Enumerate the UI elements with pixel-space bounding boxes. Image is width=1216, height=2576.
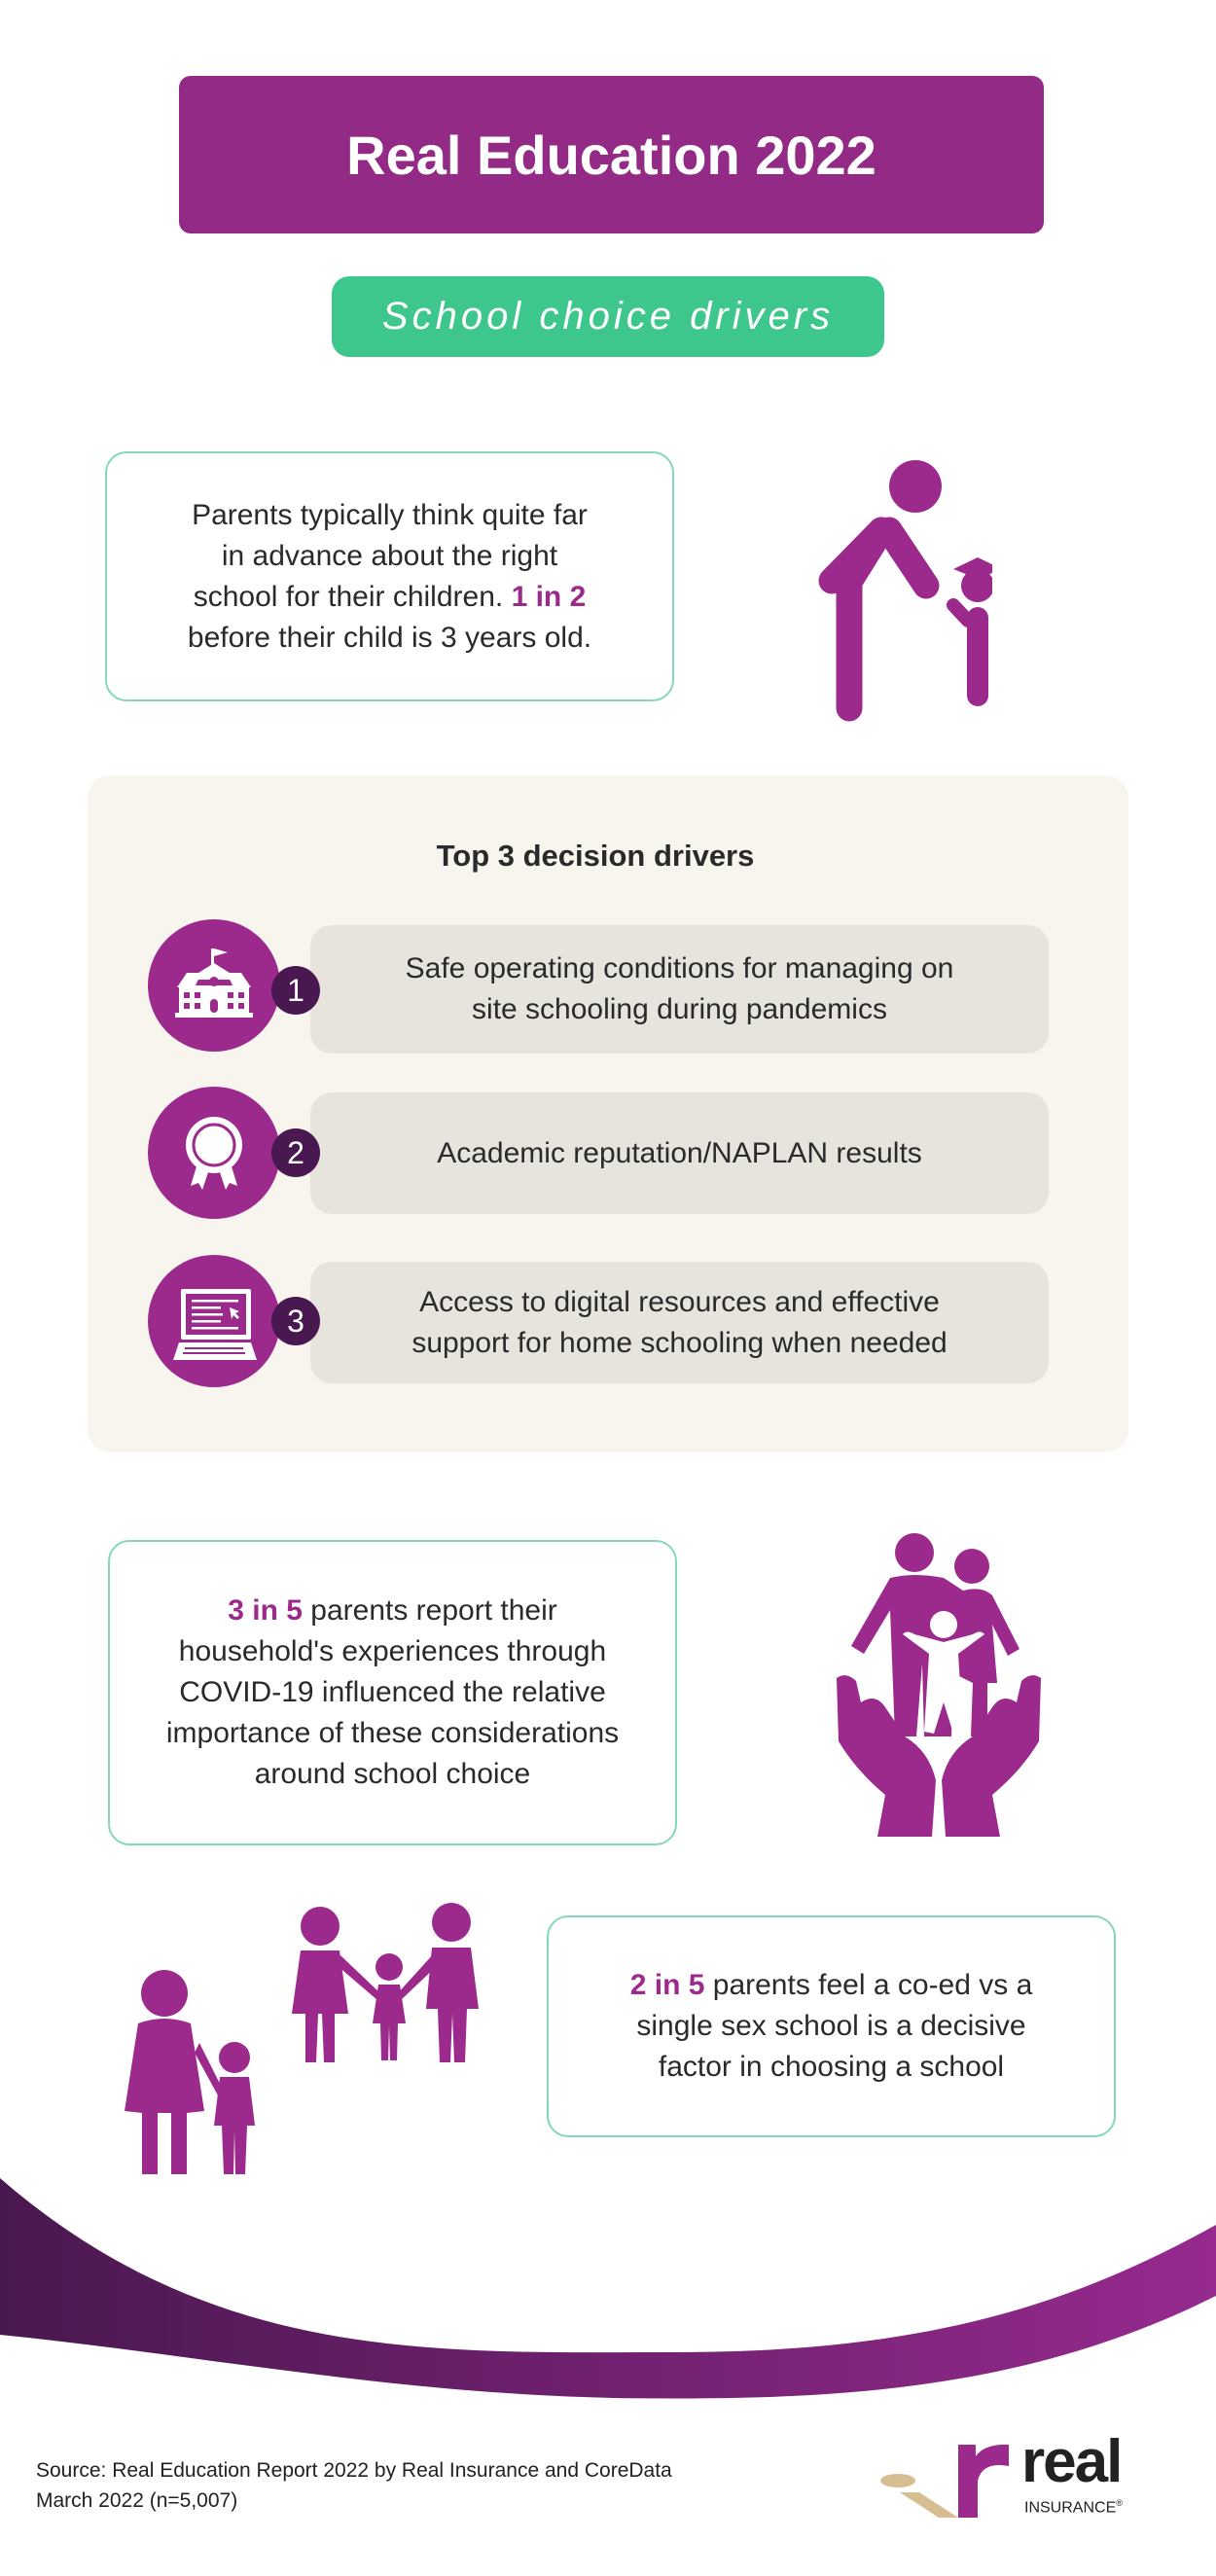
subtitle pill: School choice drivers [382,295,834,338]
source text: March 2022 (n=5,007) [36,2489,237,2512]
driver 3 text: support for home schooling when needed [411,1327,948,1358]
text block: co-ed [547,1915,1116,2137]
icon: families [125,1903,479,2174]
icon: parent with graduate child [819,460,992,722]
text block: co-ed: factor in choosing a school [659,2051,1004,2083]
badge 1 [271,966,320,1015]
icon: school [148,919,280,1052]
text block: covid influence: COVID-19 influenced the relative [179,1676,606,1708]
driver 1 text [310,925,1049,1054]
subtitle pill [332,276,884,357]
badge 3 [271,1297,320,1345]
logo: real insurance [880,2428,1123,2518]
text block: covid influence: household's experiences through [179,1635,606,1667]
panel: top 3 decision drivers [88,775,1128,1452]
title banner [179,76,1044,233]
text block: covid influence: importance of these considerations [166,1717,619,1749]
decorative wave [0,2178,1216,2399]
logo: real insurance: INSURANCE® [1024,2498,1123,2516]
driver 3 text [310,1262,1049,1383]
text block: parents plan ahead: in advance about the right [222,539,557,572]
text block: covid influence: 3 in 5 parents report their [228,1594,557,1627]
badge 2: 2 [287,1134,304,1169]
text block: covid influence: around school choice [255,1758,530,1790]
badge 1: 1 [287,973,304,1008]
text block: covid influence [108,1540,677,1845]
source text [36,2459,672,2512]
text block: parents plan ahead: school for their children. 1 in 2 [194,580,586,613]
icon: award rosette [148,1087,280,1219]
icon: laptop [148,1255,280,1387]
source text: Source: Real Education Report 2022 by Real Insurance and CoreData [36,2459,672,2482]
badge 3: 3 [287,1304,304,1339]
icon: family in hands [837,1533,1041,1837]
logo: real insurance: real [1021,2428,1121,2495]
text block: parents plan ahead [105,451,674,701]
text block: co-ed: 2 in 5 parents feel a co-ed vs a [630,1969,1032,2001]
title banner: Real Education 2022 [346,125,876,185]
driver 2 text: Academic reputation/NAPLAN results [437,1136,922,1169]
text block: parents plan ahead: Parents typically think quite far [192,498,588,531]
driver 2 text [310,1092,1049,1214]
text block: co-ed: single sex school is a decisive [636,2010,1026,2042]
badge 2 [271,1128,320,1177]
driver 1 text: site schooling during pandemics [472,993,887,1025]
driver 3 text: Access to digital resources and effective [419,1286,940,1317]
heading: top 3: Top 3 decision drivers [437,839,754,873]
text block: parents plan ahead: before their child is 3 years old. [188,621,591,654]
driver 1 text: Safe operating conditions for managing on [406,952,953,984]
